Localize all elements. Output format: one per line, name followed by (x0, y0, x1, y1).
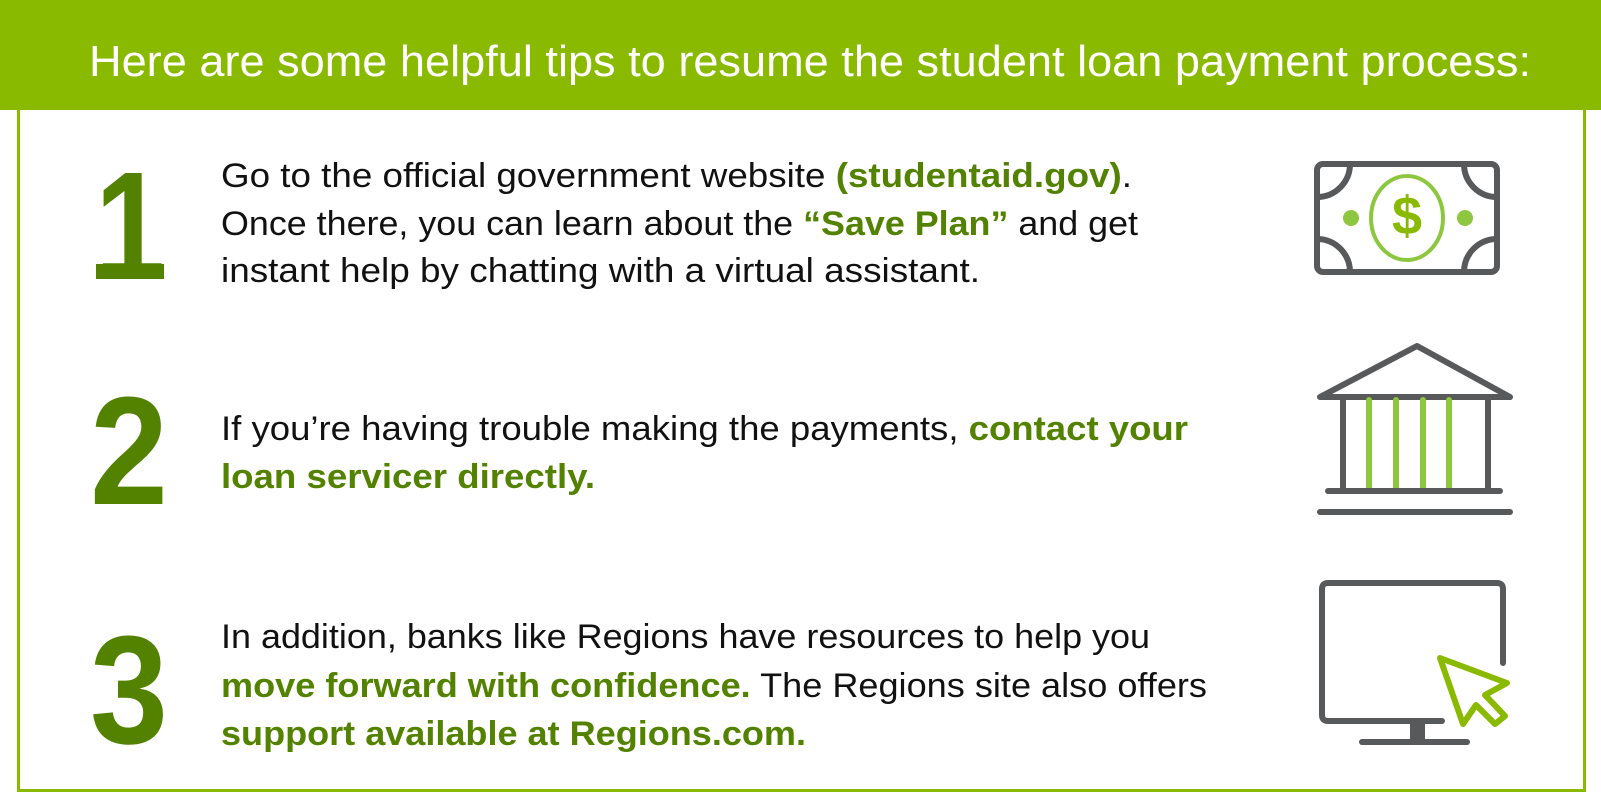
icon: bank (1320, 346, 1510, 512)
tip 3 (90, 604, 1207, 776)
tip 2 text: If you’re having trouble making the payments, contact your (221, 410, 1188, 448)
number 2: 2 (90, 365, 168, 537)
tip 3 text: support available at Regions.com. (221, 715, 806, 753)
tip 1 text (221, 157, 1139, 290)
number 3: 3 (90, 604, 168, 776)
tip 2 text (221, 410, 1188, 496)
header banner (0, 0, 1601, 110)
icon: money bill (1317, 164, 1497, 272)
tip 3 text: In addition, banks like Regions have resources to help you (221, 618, 1150, 656)
icon: money bill: $ (1392, 186, 1422, 246)
tip 2 text: loan servicer directly. (221, 458, 595, 496)
tip 1 (95, 140, 1139, 312)
tip 1 text: Once there, you can learn about the “Save Plan” and get (221, 205, 1139, 243)
icon: monitor with cursor (1322, 583, 1507, 742)
tip 1 text: instant help by chatting with a virtual assistant. (221, 252, 980, 290)
title: Here are some helpful tips to resume the student loan payment process: (89, 37, 1531, 86)
tip 1 text: Go to the official government website (studentaid.gov) . (221, 157, 1132, 195)
tip 2 (90, 365, 1188, 537)
number 1: 1 (95, 140, 165, 312)
tip 3 text (221, 618, 1207, 753)
tip 3 text: move forward with confidence. The Regions site also offers (221, 667, 1207, 705)
